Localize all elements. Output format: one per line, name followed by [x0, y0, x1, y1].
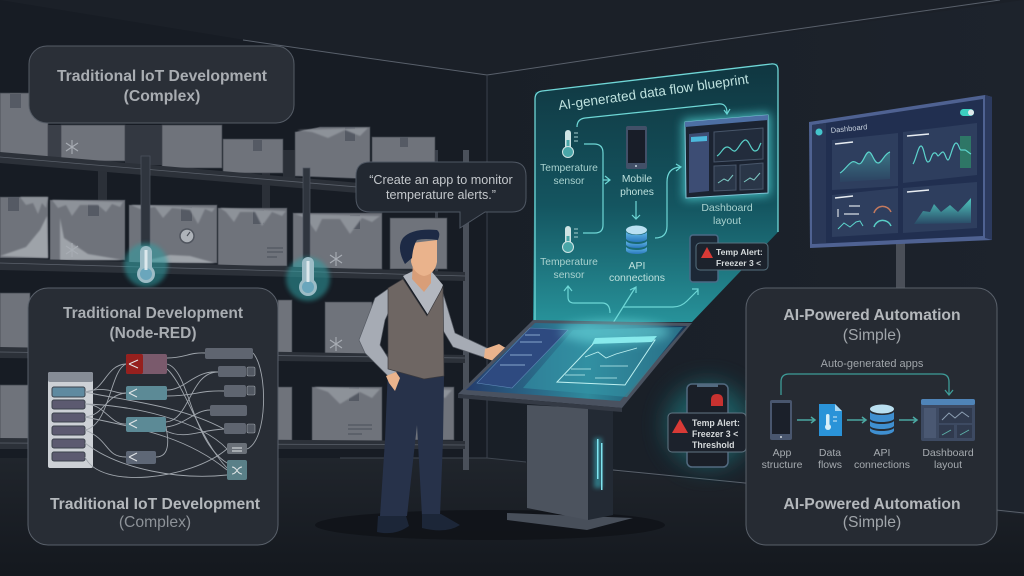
shoes	[377, 514, 460, 533]
heading: Simple: (Simple)	[843, 327, 901, 344]
alert callout	[668, 413, 746, 452]
touchscreen kiosk	[458, 320, 692, 530]
hovering alert phone: Temp Alert:	[692, 418, 740, 428]
panel: top heading Traditional IoT Development: Traditional IoT Development	[57, 68, 268, 85]
heading: AI-Powered Automation: AI-Powered Automation	[783, 307, 961, 324]
alert phone with callout: Temp Alert:	[716, 247, 763, 257]
snowflakes and gauge	[66, 140, 372, 434]
panel: traditional development Node-RED	[28, 288, 278, 545]
kiosk pedestal	[507, 513, 633, 530]
chart 4	[903, 182, 977, 233]
speech bubble: “Create an app to monitor	[369, 173, 513, 187]
icon: mobile phone	[626, 126, 647, 169]
label: temperature sensor 2: Temperature	[540, 257, 598, 268]
label: temperature sensor 2: sensor	[554, 270, 585, 281]
function nodes	[126, 348, 255, 480]
neck	[412, 262, 431, 292]
label: dashboard layout: Dashboard	[922, 447, 974, 459]
thermometer icon 1	[562, 130, 578, 158]
icon: data flow document	[819, 404, 842, 436]
chart 1	[832, 133, 898, 190]
label: app structure: App	[773, 447, 791, 459]
thermometer sensor left, on post	[124, 156, 168, 287]
shelf beams	[0, 152, 465, 449]
label: app structure: structure	[762, 459, 803, 471]
label: temperature sensor 1: Temperature	[540, 163, 598, 174]
speech bubble: temperature alerts.”	[386, 188, 496, 202]
right arm	[441, 293, 487, 358]
caption: Simple: (Simple)	[843, 514, 901, 531]
kiosk screen frame	[458, 320, 692, 408]
label: data flows: flows	[818, 459, 842, 471]
toggle	[960, 109, 974, 116]
left screen panel	[477, 328, 568, 388]
arrow 2	[847, 417, 866, 423]
hovering alert phone: Freezer 3 <	[692, 429, 738, 439]
label: dashboard layout: Dashboard	[701, 202, 753, 214]
warehouse shelves with frozen boxes	[0, 93, 469, 470]
trousers	[380, 368, 444, 516]
monitor frame	[809, 95, 992, 248]
hovering alert phone: Threshold	[692, 440, 735, 450]
uprights and box side faces	[48, 125, 469, 470]
hovering alert phone	[666, 383, 763, 467]
icon: app structure phone	[770, 400, 792, 440]
ice drips	[20, 128, 452, 404]
shirt	[403, 270, 443, 318]
left arm	[359, 286, 397, 376]
arrow 1	[797, 417, 815, 423]
monitor stand	[896, 243, 905, 289]
icon: dashboard layout	[921, 399, 975, 441]
label: API connections: API	[629, 260, 645, 272]
arrow: auto-generated loop	[781, 374, 953, 395]
label: temperature sensor 1: sensor	[554, 176, 585, 187]
monitor title: Dashboard	[830, 122, 868, 135]
label: data flows: Data	[819, 447, 841, 459]
icon: database	[626, 226, 647, 254]
face	[411, 240, 437, 276]
chart 2	[903, 123, 977, 183]
vest	[388, 279, 444, 379]
monitor dashboard	[809, 95, 992, 289]
label: dashboard layout: layout	[713, 215, 741, 227]
label: mobile phones: Mobile	[622, 174, 652, 185]
heading: Node-RED: (Node-RED)	[110, 325, 196, 342]
arrow 3	[899, 417, 917, 423]
person presenting	[359, 230, 516, 533]
hand	[484, 344, 516, 361]
label: API connections: connections	[609, 272, 665, 284]
caption: Traditional IoT Development: Traditional IoT Development	[50, 496, 261, 513]
connection wires	[85, 353, 264, 477]
panel: AI-powered automation	[746, 288, 997, 545]
speech bubble	[356, 162, 526, 228]
box tape	[8, 94, 408, 401]
label: mobile phones: phones	[620, 187, 654, 198]
alert phone with callout	[690, 235, 768, 282]
panel: top heading Traditional IoT Development: (Complex)	[124, 88, 200, 105]
thermometer icon 2	[562, 226, 578, 252]
node flow diagram	[48, 348, 264, 480]
label: API connections: API	[874, 447, 890, 459]
snow mounds	[0, 216, 215, 263]
chart 3 gauges	[832, 188, 898, 237]
phone warning icon	[711, 394, 723, 406]
heading: Node-RED: Traditional Development	[63, 305, 243, 322]
caption: AI-Powered Automation: AI-Powered Automation	[783, 496, 961, 513]
flow lines	[564, 104, 730, 323]
pedestal light strips	[594, 438, 602, 490]
blueprint title: AI-generated data flow blueprint	[557, 71, 750, 113]
right screen panel	[523, 327, 683, 397]
label: API connections: connections	[854, 459, 910, 471]
panel: top heading Traditional IoT Development	[29, 46, 294, 123]
hair	[400, 230, 439, 264]
label: auto-generated apps: Auto-generated apps	[821, 358, 924, 370]
alert phone with callout: Freezer 3 <	[716, 258, 761, 268]
top row boxes	[0, 93, 454, 442]
icon: database	[870, 404, 894, 435]
thermometer sensor right, on post	[286, 168, 330, 301]
label: dashboard layout: layout	[934, 459, 962, 471]
caption: Complex: (Complex)	[119, 514, 191, 531]
pocket hand	[386, 372, 400, 391]
dashboard blueprint	[683, 113, 770, 200]
input list node	[48, 372, 93, 468]
holographic blueprint panel	[533, 63, 778, 323]
